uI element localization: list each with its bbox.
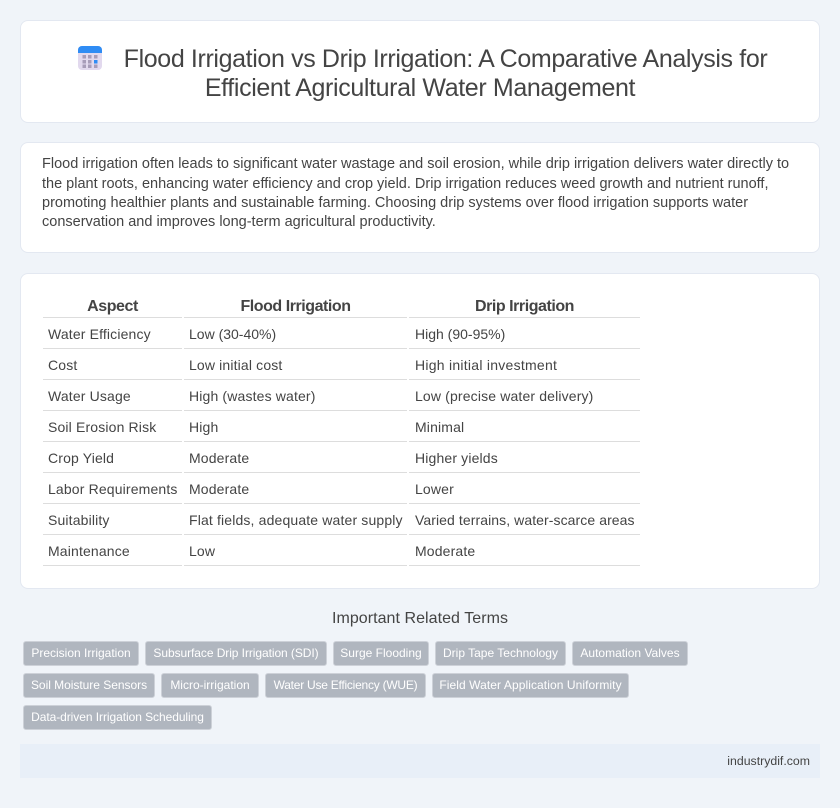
intro text: Flood irrigation often leads to significant water wastage and soil erosion, while drip irrigation delivers water directly to [42,156,789,172]
comparison table: Soil Erosion Risk [48,419,156,435]
comparison table: Moderate [189,481,249,497]
comparison table: Aspect [87,298,138,315]
intro text [42,156,789,230]
comparison table: Suitability [48,512,110,528]
tag list: Data-driven Irrigation Scheduling [31,710,204,724]
comparison table: Moderate [189,450,249,466]
comparison table: Flat fields, adequate water supply [189,512,403,528]
intro panel [20,142,820,253]
comparison table: Moderate [415,543,475,559]
tag list: Water Use Efficiency (WUE) [274,678,417,692]
tag list: Automation Valves [580,646,680,660]
related terms heading: Important Related Terms [332,610,508,627]
intro text: promoting healthier plants and sustainable farming. Choosing drip systems over flood irrigation supports water [42,195,748,211]
header panel [20,20,820,123]
comparison table: Water Efficiency [48,326,151,342]
comparison table: Low [189,543,215,559]
intro text: conservation and improves long-term agricultural productivity. [42,214,436,230]
tag list: Field Water Application Uniformity [439,678,622,692]
tag list [23,641,688,730]
table panel [20,273,820,589]
tag list: Subsurface Drip Irrigation (SDI) [153,646,319,660]
comparison table: Minimal [415,419,464,435]
footer source text: industrydif.com [727,754,810,768]
tag list: Surge Flooding [340,646,422,660]
comparison table: Crop Yield [48,450,114,466]
comparison table: Cost [48,357,77,373]
title: Flood Irrigation vs Drip Irrigation: A Comparative Analysis for [124,45,767,73]
title [124,45,768,102]
comparison table: Varied terrains, water-scarce areas [415,512,635,528]
comparison table: Drip Irrigation [475,298,574,315]
comparison table: Lower [415,481,454,497]
icon: calendar [78,46,102,70]
comparison table: High [189,419,218,435]
comparison table: Water Usage [48,388,131,404]
comparison table: High (wastes water) [189,388,316,404]
comparison table: Low (30-40%) [189,326,276,342]
comparison table: Maintenance [48,543,130,559]
title: Efficient Agricultural Water Management [205,74,635,102]
comparison table: Labor Requirements [48,481,178,497]
tag list: Soil Moisture Sensors [31,678,147,692]
comparison table: Flood Irrigation [240,298,351,315]
intro text: the plant roots, enhancing water efficiency and crop yield. Drip irrigation reduces weed growth and nutrient runoff, [42,176,768,192]
tag list: Drip Tape Technology [443,646,558,660]
footer bar [20,744,820,778]
comparison table: Higher yields [415,450,498,466]
tag list: Micro-irrigation [170,678,250,692]
comparison table [43,298,640,566]
comparison table: High (90-95%) [415,326,505,342]
comparison table: Low initial cost [189,357,282,373]
comparison table: Low (precise water delivery) [415,388,593,404]
comparison table: High initial investment [415,357,557,373]
tag list: Precision Irrigation [31,646,131,660]
